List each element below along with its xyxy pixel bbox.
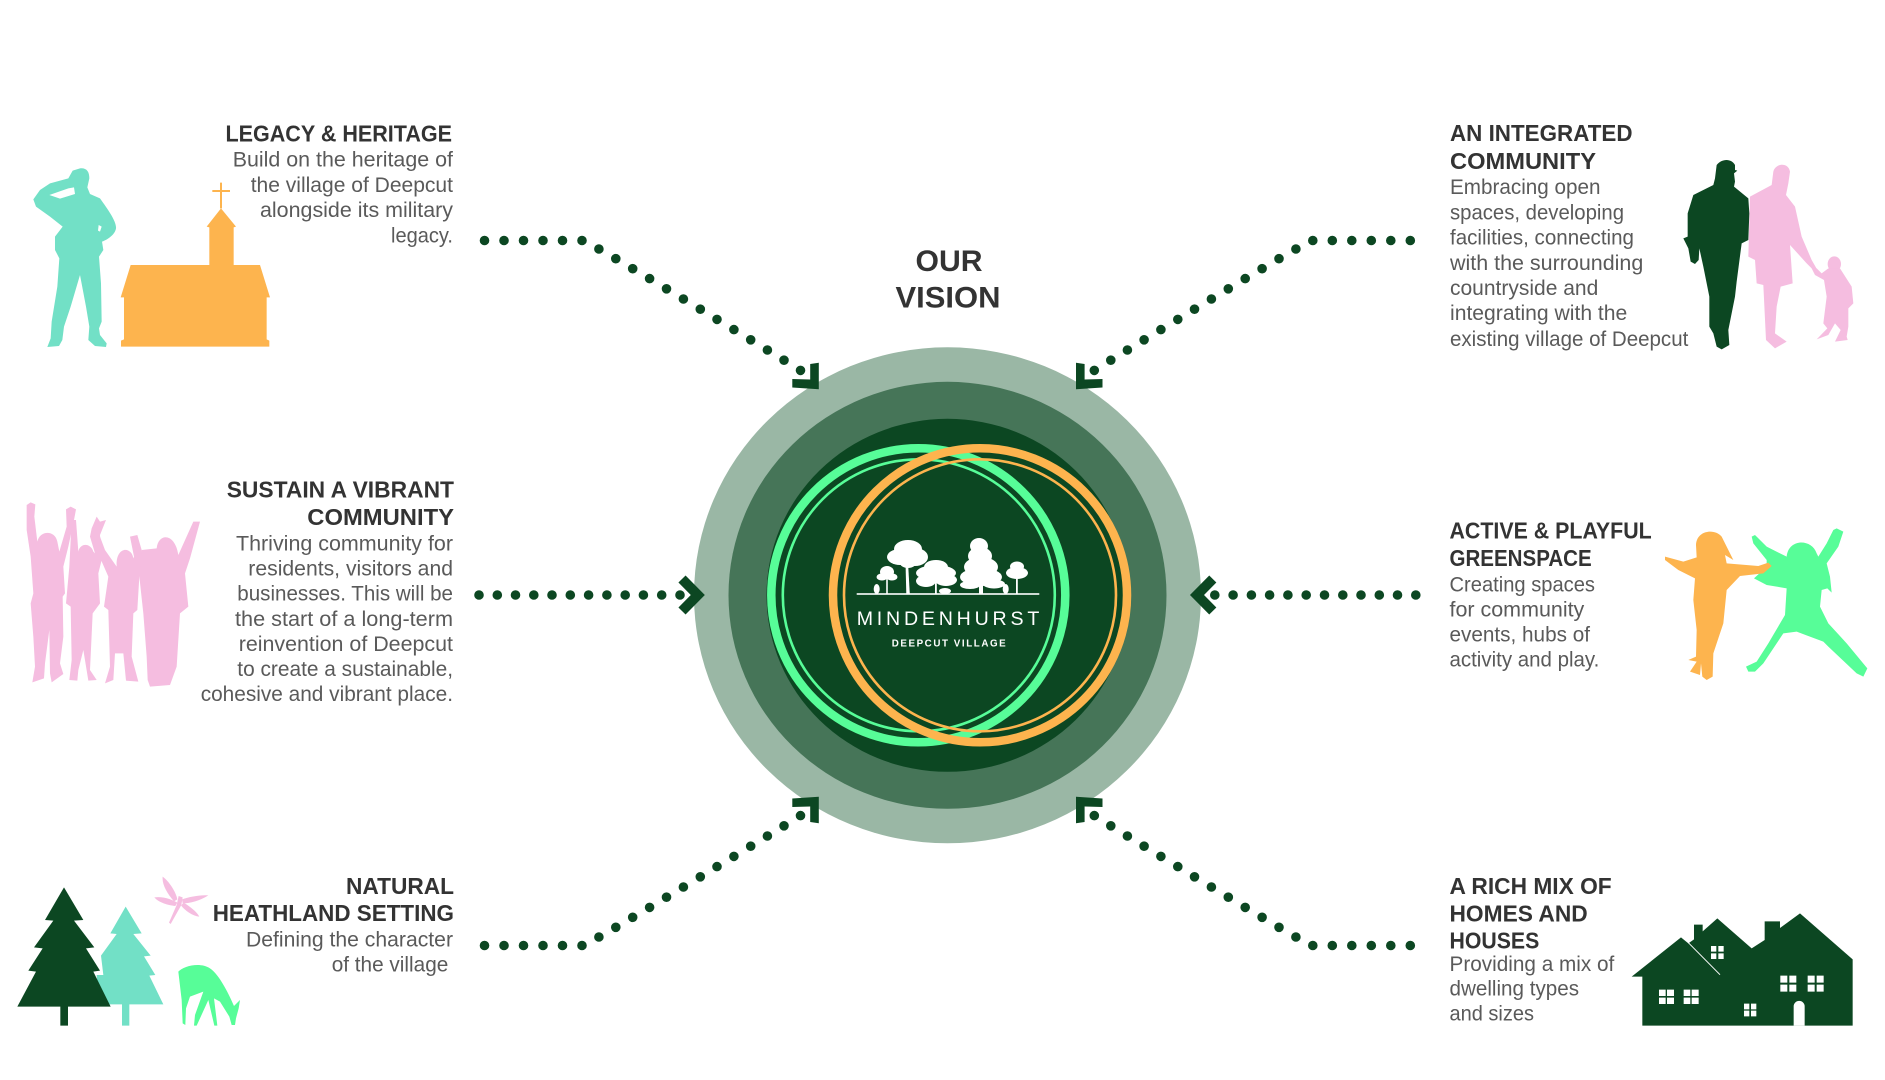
text block: to create a sustainable, — [237, 657, 453, 681]
heading: COMMUNITY — [307, 504, 454, 530]
heading: AN INTEGRATED — [1450, 120, 1632, 146]
heading: ACTIVE & PLAYFUL — [1450, 517, 1652, 543]
panel: a rich mix of homes and houses — [1450, 873, 1853, 1026]
orange overlapping ring — [833, 448, 1127, 742]
heading: LEGACY & HERITAGE — [226, 121, 452, 147]
text block — [1450, 573, 1599, 672]
icon: dark pine tree — [17, 887, 111, 1026]
heading: our vision: OUR — [916, 245, 983, 278]
text block — [201, 532, 453, 706]
text block: Thriving community for — [236, 532, 453, 556]
icon: teal pine tree — [97, 907, 163, 1026]
logo: tree line — [857, 538, 1039, 595]
icon: man walking — [1683, 160, 1749, 349]
heading — [1450, 873, 1612, 954]
text block: spaces, developing — [1450, 200, 1624, 224]
text block: businesses. This will be — [237, 582, 453, 606]
text block: with the surrounding — [1449, 251, 1643, 275]
middle ring — [728, 382, 1166, 809]
arrow: top left connector — [484, 240, 819, 389]
text block — [1449, 175, 1688, 351]
arrow: middle right connector — [1197, 579, 1416, 611]
heading: HOMES AND — [1450, 900, 1588, 926]
text block: Defining the character — [246, 928, 453, 952]
arrow: middle left connector — [479, 579, 698, 611]
text block: Build on the heritage of — [233, 148, 453, 172]
panel: natural heathland setting — [17, 873, 454, 1026]
text block: dwelling types — [1450, 977, 1579, 1001]
panel: legacy and heritage — [33, 121, 453, 347]
text block: cohesive and vibrant place. — [201, 682, 453, 706]
inner disc — [766, 419, 1128, 772]
text block: facilities, connecting — [1450, 226, 1634, 250]
text block: and sizes — [1450, 1002, 1534, 1026]
heading — [227, 476, 454, 530]
heading — [1450, 517, 1652, 571]
text block: integrating with the — [1450, 301, 1627, 325]
heading — [213, 873, 454, 926]
text block: events, hubs of — [1450, 623, 1590, 647]
panel: an integrated community — [1449, 120, 1853, 351]
icon: jumping child orange — [1665, 532, 1772, 680]
text block: of the village — [332, 953, 448, 977]
heading: A RICH MIX OF — [1450, 873, 1612, 899]
text block: Providing a mix of — [1450, 952, 1614, 976]
icon: jumping child green — [1746, 528, 1867, 677]
text block: for community — [1450, 598, 1585, 622]
icon: group of children cheering — [27, 502, 200, 687]
text block: Creating spaces — [1450, 573, 1595, 597]
heading: our vision: VISION — [896, 282, 1000, 315]
text block: the village of Deepcut — [251, 173, 453, 197]
text block — [1450, 952, 1614, 1026]
text block: Embracing open — [1450, 175, 1600, 199]
green overlapping ring — [771, 448, 1065, 742]
heading: COMMUNITY — [1450, 148, 1596, 174]
heading: HEATHLAND SETTING — [213, 900, 454, 926]
icon: houses — [1632, 913, 1853, 1026]
text block — [233, 148, 453, 247]
text block: alongside its military — [260, 198, 453, 222]
text block: the start of a long-term — [235, 607, 453, 631]
icon: dragonfly — [154, 877, 208, 924]
text block — [246, 928, 453, 977]
arrow: bottom right connector — [1076, 797, 1410, 946]
text block: countryside and — [1450, 276, 1598, 300]
icon: church — [121, 183, 270, 347]
heading: GREENSPACE — [1450, 545, 1592, 571]
central vision diagram — [694, 347, 1201, 843]
panel: active and playful greenspace — [1450, 517, 1867, 680]
heading: HOUSES — [1450, 928, 1539, 954]
heading: SUSTAIN A VIBRANT — [227, 476, 454, 502]
text block: residents, visitors and — [248, 556, 453, 580]
text block: reinvention of Deepcut — [239, 632, 453, 656]
heading: our vision — [896, 245, 1000, 315]
logo strapline: DEEPCUT VILLAGE — [892, 639, 1006, 650]
text block: existing village of Deepcut — [1450, 327, 1688, 351]
text block: legacy. — [391, 223, 453, 247]
arrow: bottom left connector — [484, 797, 819, 946]
text block: activity and play. — [1450, 648, 1599, 672]
heading: NATURAL — [346, 873, 454, 899]
panel: sustain a vibrant community — [27, 476, 454, 706]
outer ring — [694, 347, 1201, 843]
arrow: top right connector — [1076, 240, 1410, 389]
icon: saluting soldier — [33, 168, 116, 347]
icon: woman and child — [1748, 165, 1853, 348]
logo wordmark: MINDENHURST — [857, 608, 1039, 630]
icon: grazing deer — [178, 965, 240, 1026]
heading — [1450, 120, 1632, 174]
